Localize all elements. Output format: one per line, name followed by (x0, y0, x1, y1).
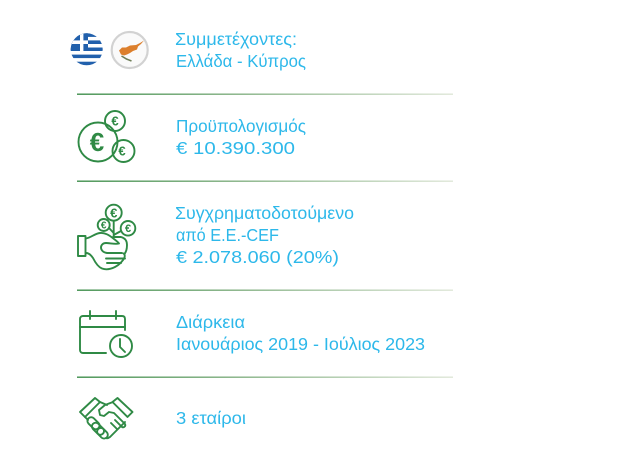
icon: hand with coins: € (101, 221, 107, 232)
text: participants: Συμμετέχοντες: (175, 29, 297, 49)
text: duration (176, 312, 425, 354)
text: duration: Ιανουάριος 2019 - Ιούλιος 2023 (176, 334, 425, 354)
text: participants: Ελλάδα - Κύπρος (176, 51, 306, 71)
divider 1 (77, 94, 453, 95)
icon: euro coins (78, 111, 134, 162)
text: co-funding: από Ε.Ε.-CEF (176, 225, 279, 245)
icon: euro coins: € (90, 127, 104, 157)
text: duration: Διάρκεια (176, 312, 245, 332)
text: partners: 3 εταίροι (176, 408, 246, 428)
text: co-funding (175, 203, 354, 267)
icon: Greek flag (70, 33, 104, 66)
text: co-funding: Συγχρηματοδοτούμενο (175, 203, 354, 223)
icon: Cyprus flag (112, 32, 148, 68)
icon: euro coins: € (118, 144, 126, 158)
icon: calendar with clock (80, 311, 132, 357)
divider 2 (77, 180, 453, 182)
text: budget (176, 116, 306, 158)
divider 3 (77, 290, 453, 291)
icon: euro coins: € (111, 114, 119, 128)
text: participants (175, 29, 306, 71)
icon: handshake (80, 398, 132, 440)
divider 4 (77, 376, 453, 378)
icon: hand with coins: € (110, 206, 117, 220)
text: co-funding: € 2.078.060 (20%) (176, 247, 339, 267)
icon: hand with coins: € (125, 223, 131, 235)
text: budget: € 10.390.300 (176, 138, 295, 158)
text: budget: Προϋπολογισμός (176, 116, 306, 136)
icon: hand with coins (78, 205, 135, 269)
